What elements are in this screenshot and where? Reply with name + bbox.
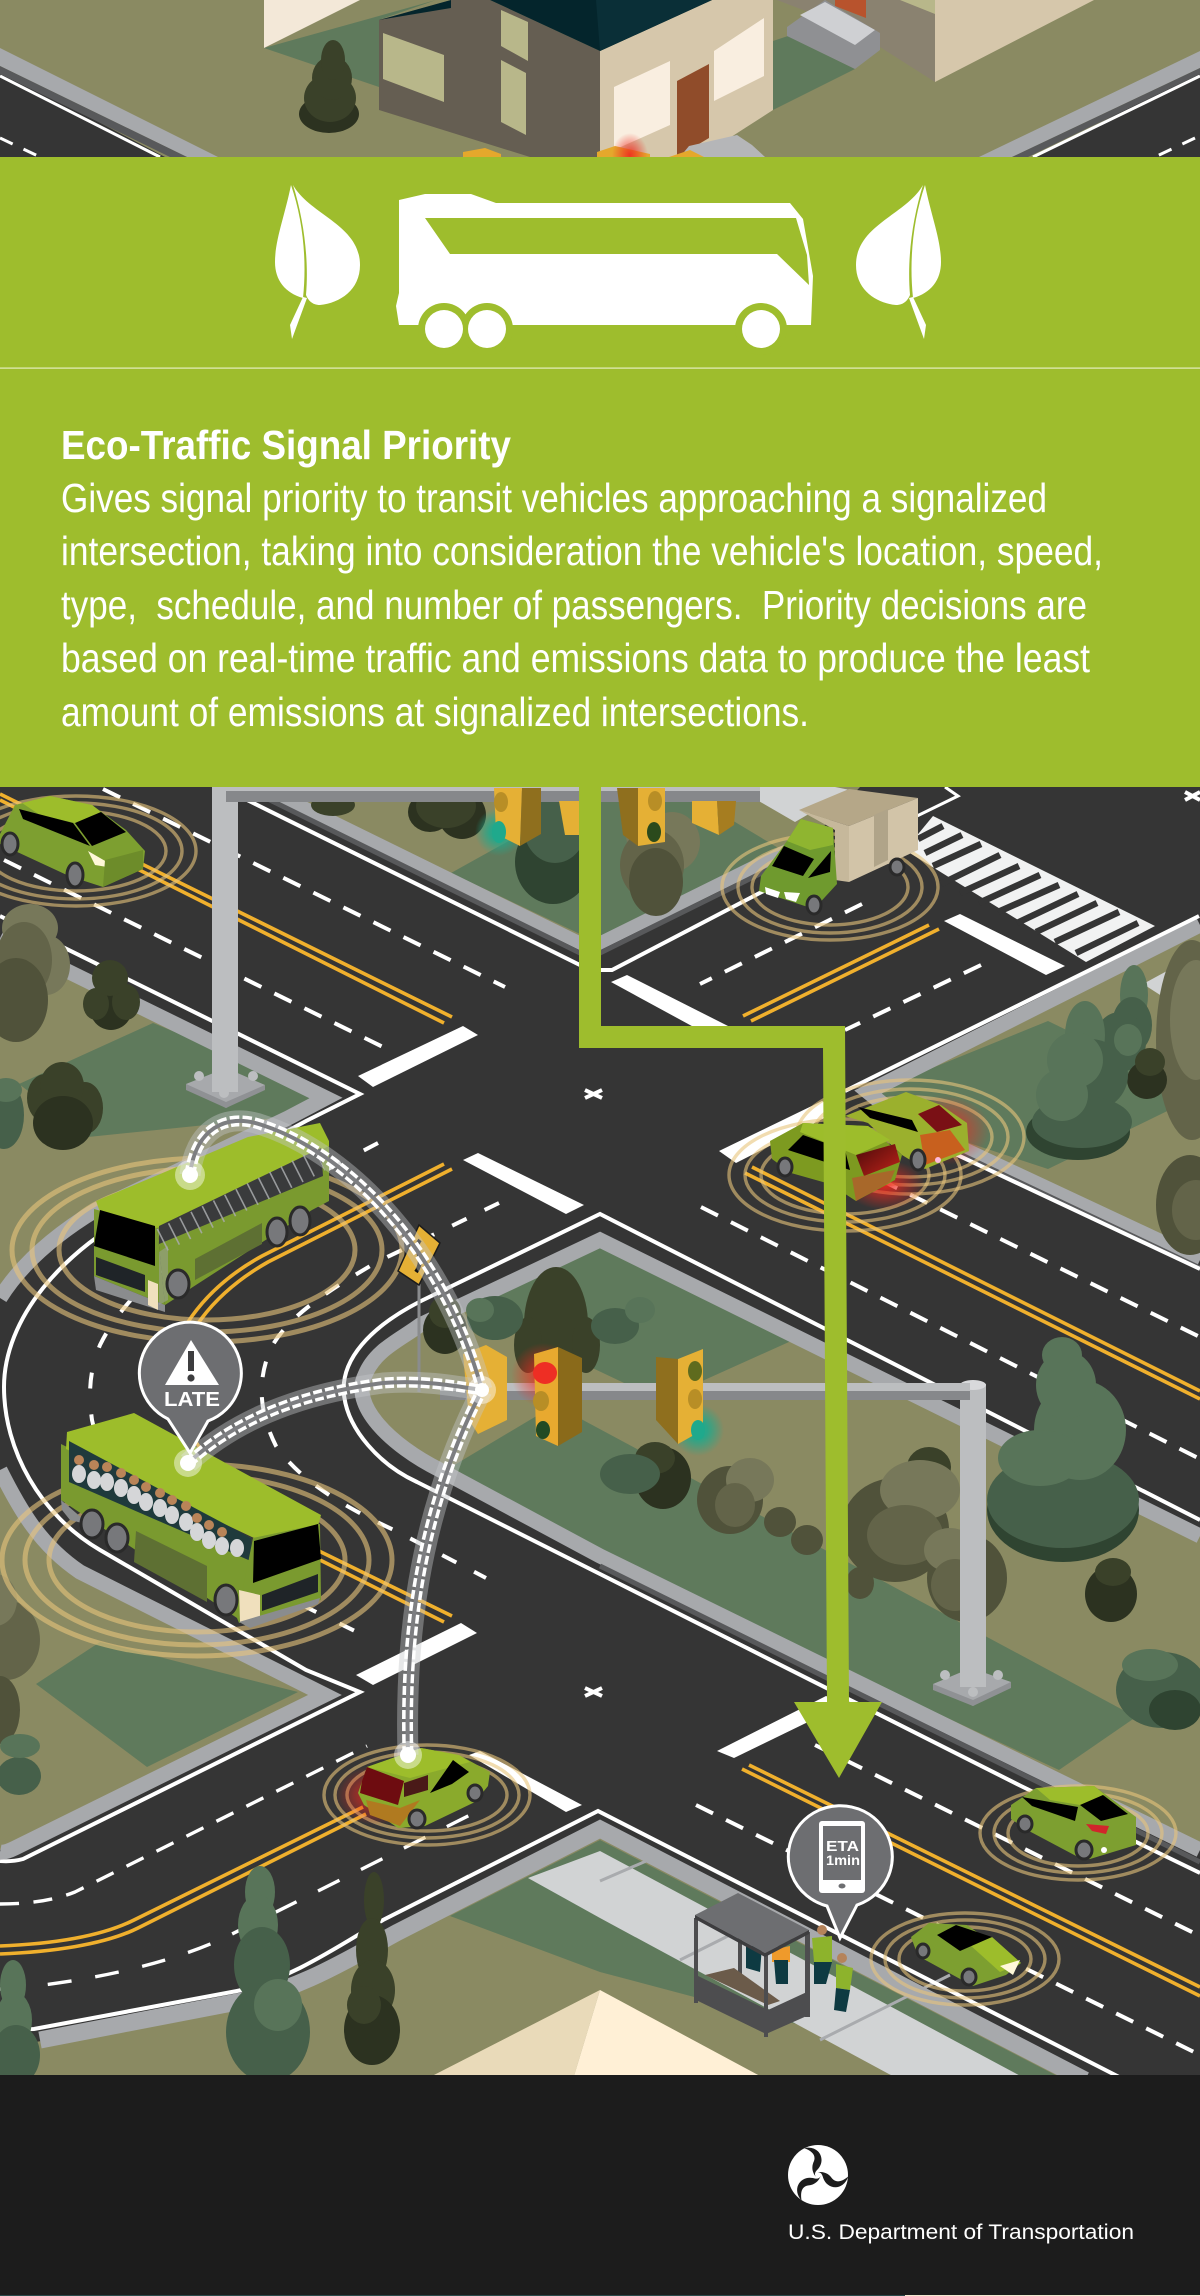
rider with phone: [812, 1925, 832, 1984]
green route arrow: [579, 780, 882, 1778]
vehicle: green suv lower right: [1011, 1786, 1136, 1859]
vehicle: bus with seats (on time): [94, 1123, 329, 1312]
scene: houses at top: [0, 0, 1200, 177]
land: south block with sidewalk: [0, 1811, 1125, 2080]
trees: north-west: [0, 904, 140, 1150]
seat backs in windows: [162, 1160, 320, 1240]
body text: amount of emissions at signalized intersections.: [61, 689, 809, 735]
land: north block: [221, 787, 958, 970]
callout: LATE bubble: [139, 1322, 241, 1453]
bus shelter with waiting riders: [694, 1893, 853, 2037]
vehicle: delivery truck: [759, 789, 918, 914]
callout: ETA phone bubble: [788, 1806, 892, 1938]
centre x marks: [585, 792, 1200, 1696]
signal pole south-east: [440, 1380, 1011, 1706]
riders in shelter: [746, 1946, 790, 1984]
land: west block: [0, 916, 360, 1861]
stop bars: [356, 914, 1065, 1812]
land: south-west block: [0, 1470, 325, 1852]
scene: intersection road base: [0, 787, 1200, 2077]
footer: [0, 2075, 1200, 2296]
tree near house: [299, 40, 359, 133]
icon: green bus: [396, 194, 813, 355]
vehicle: late bus with passengers: [61, 1413, 321, 1628]
sign: curve warning: [398, 1225, 440, 1392]
traffic signal: green, east on arm: [656, 1349, 724, 1456]
trees: central median: [423, 1267, 1200, 1730]
vehicle: red-tail car at left intersection: [335, 1748, 490, 1828]
vehicle: top-left green car: [0, 796, 145, 887]
traffic signal: back-facing: [463, 1345, 507, 1434]
callout: ETA phone bubble: ETA: [826, 1838, 859, 1855]
body text: Gives signal priority to transit vehicles approaching a signalized: [61, 475, 1047, 521]
land: central median: [344, 1214, 1200, 1873]
trees: south and west: [0, 1574, 400, 2085]
signal pole north-west: [186, 787, 760, 1108]
trees: east block: [1026, 940, 1200, 1255]
lane markings: [0, 789, 1200, 2055]
communication arcs: [174, 1121, 496, 1769]
icon: left leaf: [275, 185, 360, 339]
crosswalk: [905, 816, 1155, 962]
land: east block: [845, 916, 1200, 1269]
signal rings: all vehicles: [0, 796, 1176, 2005]
heading: Eco-Traffic Signal Priority: [61, 422, 511, 468]
passenger windows: [69, 1441, 253, 1562]
building with picket front: [264, 0, 360, 48]
icon: DOT triskelion logo: [788, 2145, 849, 2205]
organisation name: U.S. Department of Transportation: [788, 2221, 1134, 2244]
icon: right leaf: [856, 185, 941, 339]
trees: north block: [311, 784, 700, 916]
callout: ETA phone bubble: 1min: [826, 1852, 860, 1868]
neighbouring house: [777, 0, 1094, 82]
traffic signals on north arm: [475, 788, 736, 856]
vehicle: red-tail car, rear of pair: [845, 1092, 990, 1170]
body text: [61, 475, 1103, 735]
vehicle: green sports car: [911, 1923, 1021, 1986]
traffic signal: red: [511, 1343, 582, 1446]
callout: LATE bubble: LATE: [164, 1389, 220, 1411]
second rider: [834, 1953, 853, 2012]
main house: [379, 0, 773, 157]
panel: green title band: [0, 157, 1200, 787]
vehicle: red-tail car, front of pair: [770, 1123, 925, 1210]
